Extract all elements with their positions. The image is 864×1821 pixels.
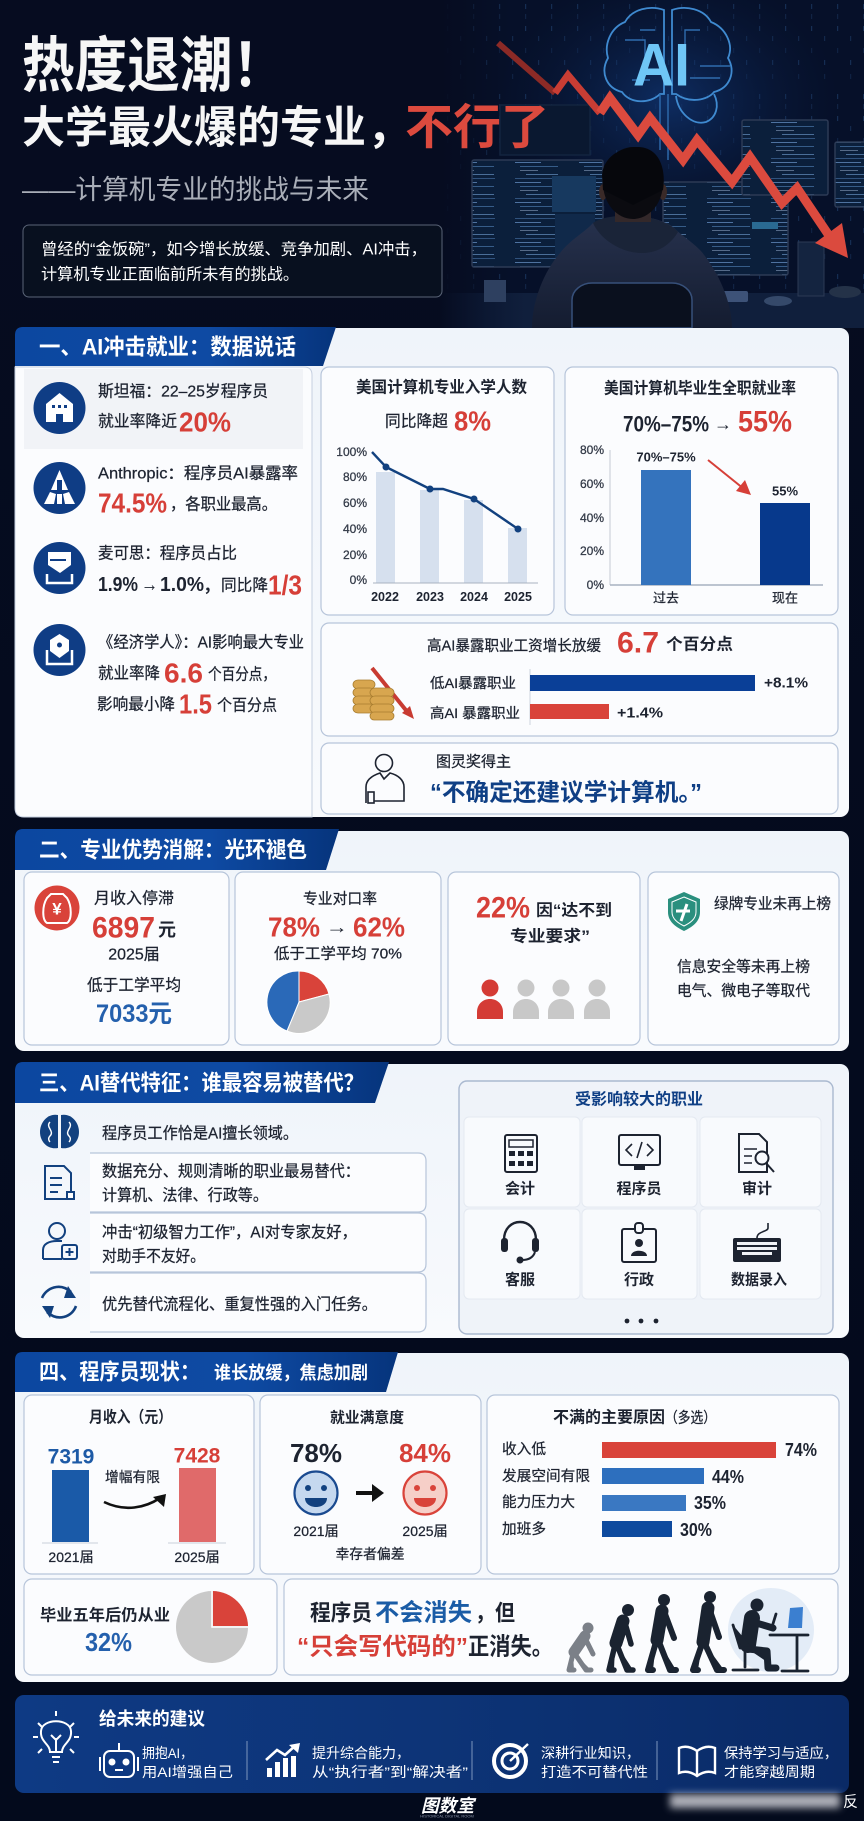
advice: embrace AI: 用AI增强自己	[142, 1764, 233, 1780]
stat: The Economist: 就业率降	[98, 664, 160, 682]
icon: target	[494, 1744, 528, 1777]
wage bars: 高AI 暴露职业	[430, 705, 520, 721]
card: green-badge majors: 电气、微电子等取代	[677, 982, 810, 1000]
panel: wage growth slowdown: 6.7	[617, 626, 659, 660]
person from behind	[532, 147, 732, 328]
desk with keyboard and mouse	[440, 242, 864, 328]
headline comma: ，	[367, 104, 411, 152]
bar chart: 60%	[580, 477, 604, 491]
stat: The Economist: 个百分点，	[208, 666, 276, 684]
horizontal bar chart: 30%	[680, 1520, 712, 1540]
stat: Anthropic	[98, 464, 298, 518]
stat: Stanford: 斯坦福：22–25岁程序员	[98, 382, 268, 400]
stat: Anthropic: 74.5%	[98, 488, 167, 518]
horizontal bar chart: 44%	[712, 1467, 744, 1487]
advice: deep industry knowledge: 深耕行业知识，	[541, 1745, 640, 1761]
card: job satisfaction: 84%	[399, 1438, 451, 1468]
icon: open book	[679, 1747, 715, 1776]
horizontal bar chart: 收入低	[502, 1441, 547, 1458]
red falling arrow	[498, 43, 848, 258]
chart panel: full-time employment rate: →	[714, 414, 732, 434]
card: 22 percent below requirements	[448, 872, 640, 1045]
card: job satisfaction: 2025届	[402, 1523, 448, 1539]
panel: section 4 programmer status	[15, 1352, 849, 1682]
feature row: repetitive tasks: 优先替代流程化、重复性强的入门任务。	[102, 1296, 377, 1314]
stat: The Economist: 1.5	[179, 688, 212, 720]
advice: keep learning: 才能穿越周期	[724, 1764, 815, 1780]
card: monthly income stagnant: 低于工学平均	[87, 976, 181, 994]
bar chart: 0%	[587, 578, 604, 592]
card: still in the industry after five years: 32%	[85, 1627, 132, 1657]
bar and line chart: 2025	[504, 590, 532, 604]
section 4 heading: 谁长放缓，焦虑加剧	[214, 1362, 368, 1383]
tile: audit: 审计	[742, 1180, 772, 1198]
chart panel: US CS enrolment: 8%	[454, 406, 491, 436]
section 2 heading	[15, 829, 339, 870]
icon: money bag: ¥	[52, 900, 62, 918]
panel: advice for the future: 给未来的建议	[99, 1709, 205, 1729]
panel: wage growth slowdown	[321, 623, 838, 736]
card: monthly income bars: 2025届	[174, 1549, 220, 1565]
illustration: evolution silhouettes	[569, 1588, 814, 1672]
bar chart: 过去	[653, 590, 679, 606]
bar chart: 80%	[580, 443, 604, 457]
red trend arrow	[708, 460, 751, 495]
card: green-badge majors	[648, 872, 839, 1045]
bar chart: 40%	[580, 511, 604, 525]
horizontal bar chart: 能力压力大	[502, 1494, 575, 1511]
section 2 heading: 二、专业优势消解：光环褪色	[39, 838, 307, 862]
watermark	[670, 1794, 858, 1810]
stat: Stanford: 20%	[179, 406, 231, 438]
bar and line chart: 40%	[343, 522, 367, 536]
card: monthly income stagnant	[24, 872, 229, 1045]
card: programmers will not disappear: 正消失。	[468, 1634, 553, 1660]
card: monthly income bars: 月收入（元）	[89, 1408, 172, 1426]
card: job satisfaction: 就业满意度	[330, 1408, 404, 1426]
card: 22 percent below requirements: 因“达不到	[536, 902, 612, 920]
card: job satisfaction: 2021届	[293, 1523, 339, 1539]
headline line 1: 热度退潮！	[22, 32, 285, 100]
wage bars	[430, 669, 808, 725]
section 3 heading	[15, 1062, 389, 1103]
horizontal bar chart	[502, 1440, 817, 1540]
advice: deep industry knowledge	[472, 1741, 648, 1780]
footer logo: HISTORICAL DIGITAL ROOM	[420, 1814, 474, 1818]
bar and line chart	[336, 445, 538, 604]
feature row: repetitive tasks	[42, 1273, 426, 1332]
stat: The Economist: 6.6	[164, 658, 203, 688]
icon: Economist envelope	[34, 624, 86, 676]
watermark: 反	[843, 1794, 858, 1810]
AI label: AI	[633, 32, 690, 98]
card: green-badge majors: 信息安全等未再上榜	[677, 958, 810, 976]
advice: keep learning	[657, 1741, 838, 1780]
card: programmers will not disappear: 程序员	[310, 1600, 372, 1626]
panel: Turing award winner quote	[321, 743, 838, 814]
feature row: strength area: 程序员工作恰是AI擅长领域。	[102, 1124, 298, 1142]
feature row: clear-rule jobs: 计算机、法律、行政等。	[102, 1186, 268, 1204]
card: monthly income bars: 7319	[48, 1446, 94, 1468]
bar and line chart: 60%	[343, 496, 367, 510]
stat: McKinsey: 1/3	[268, 570, 302, 600]
arrow	[356, 1484, 384, 1502]
feature row: entry-level work	[43, 1213, 426, 1272]
bar and line chart: 20%	[343, 548, 367, 562]
tile: administration	[582, 1209, 697, 1299]
panel: most affected occupations	[459, 1081, 833, 1334]
chart panel: full-time employment rate	[565, 367, 838, 615]
card: major match rate	[235, 872, 441, 1045]
stat: McKinsey: 1.0%	[160, 574, 204, 596]
intro callout	[23, 225, 442, 297]
footer logo: 图数室	[421, 1796, 477, 1816]
chart panel: US CS enrolment: 美国计算机专业入学人数	[356, 378, 527, 396]
panel: section 3 AI replacement features	[15, 1062, 849, 1338]
card: major match rate: 低于工学平均 70%	[274, 946, 402, 962]
ellipsis	[625, 1319, 658, 1323]
card: job satisfaction: 78%	[290, 1438, 342, 1468]
icon: person	[366, 754, 404, 803]
chart panel: full-time employment rate: 美国计算机毕业生全职就业率	[604, 378, 796, 398]
stat: McKinsey	[98, 544, 302, 600]
card: programmers will not disappear: ，但	[475, 1600, 515, 1626]
stat: Stanford: 就业率降近	[98, 412, 177, 430]
tile: customer service	[464, 1209, 580, 1299]
wage bars: +8.1%	[764, 674, 808, 692]
panel: most affected occupations: 受影响较大的职业	[575, 1090, 703, 1108]
card: major match rate: →	[326, 917, 348, 937]
icon: McKinsey funnel	[34, 542, 86, 594]
stat: The Economist	[97, 634, 304, 720]
section 1 heading	[15, 327, 336, 367]
intro callout: 曾经的“金饭碗”，如今增长放缓、竞争加剧、AI冲击，	[41, 240, 427, 258]
tile: audit	[700, 1117, 821, 1207]
card: monthly income bars: 增幅有限	[105, 1469, 160, 1485]
icon: document	[45, 1166, 74, 1199]
tile: programmer: 程序员	[616, 1180, 662, 1198]
icon: growth chart	[266, 1743, 300, 1777]
section 4 heading	[15, 1352, 398, 1392]
advice: raise overall capability: 提升综合能力，	[312, 1745, 410, 1761]
advice: embrace AI	[100, 1743, 233, 1780]
card: programmers will not disappear	[284, 1579, 838, 1675]
bar chart: 55%	[772, 484, 798, 498]
monitors	[472, 105, 864, 275]
bar and line chart: 2022	[371, 590, 399, 604]
panel: Turing award winner quote: 图灵奖得主	[436, 754, 511, 770]
intro callout: 计算机专业正面临前所未有的挑战。	[41, 264, 299, 284]
bar and line chart: 2023	[416, 590, 444, 604]
icon: person with briefcase	[43, 1223, 77, 1259]
bar chart: 现在	[772, 590, 798, 606]
advice: embrace AI: 拥抱AI，	[142, 1745, 193, 1761]
panel: Turing award winner quote: “不确定还建议学计算机。”	[430, 780, 702, 806]
panel: advice for the future	[15, 1695, 849, 1793]
icon: money bag	[34, 886, 80, 930]
card: 22 percent below requirements: 专业要求”	[510, 928, 590, 946]
tile: accounting	[464, 1117, 580, 1207]
bar and line chart: 80%	[343, 470, 367, 484]
bar chart: 20%	[580, 544, 604, 558]
hero illustration: programmer facing AI and falling arrow	[440, 0, 864, 328]
stat: McKinsey: →	[141, 574, 158, 596]
stat: Anthropic: ，各职业最高。	[170, 496, 277, 514]
card: 22 percent below requirements: 22%	[476, 892, 530, 924]
tile: accounting: 会计	[505, 1180, 535, 1198]
stat: Anthropic: Anthropic：程序员AI暴露率	[98, 464, 298, 482]
stat: McKinsey: ，	[203, 576, 220, 596]
advice: deep industry knowledge: 打造不可替代性	[541, 1764, 648, 1780]
section 3 heading: 三、AI替代特征：谁最容易被替代？	[39, 1070, 364, 1096]
icon: shield	[668, 892, 700, 931]
panel: section 1 AI impact	[15, 327, 849, 817]
chart panel: full-time employment rate: 55%	[738, 406, 792, 438]
card: monthly income stagnant: 6897	[92, 912, 155, 944]
chart panel: full-time employment rate: 70%–75%	[623, 412, 709, 436]
headline highlight: 不行了	[405, 102, 549, 154]
horizontal bar chart: 加班多	[502, 1521, 546, 1538]
card: programmers will not disappear: “只会写代码的”	[297, 1634, 468, 1660]
stat: McKinsey: 同比降	[221, 576, 268, 594]
wage bars: 低AI暴露职业	[430, 675, 516, 691]
wage bars: +1.4%	[617, 704, 663, 722]
card: monthly income bars	[24, 1395, 254, 1574]
feature row: clear-rule jobs	[45, 1153, 426, 1212]
tile: data entry	[700, 1209, 821, 1299]
pie chart	[176, 1591, 248, 1663]
panel: section 2 major advantages	[15, 829, 849, 1051]
stat: The Economist: 影响最小降	[97, 696, 175, 714]
advice: raise overall capability	[247, 1741, 468, 1780]
card: monthly income stagnant: 月收入停滞	[94, 890, 174, 908]
bar and line chart: 2024	[460, 590, 488, 604]
card: green-badge majors: 绿牌专业未再上榜	[714, 896, 831, 912]
left column: data points	[15, 367, 312, 817]
card: reasons for dissatisfaction	[487, 1395, 839, 1574]
icon: AI brain	[604, 8, 732, 160]
stat: McKinsey: 麦可思：程序员占比	[98, 544, 237, 562]
card: programmers will not disappear: 不会消失	[375, 1600, 472, 1626]
stat: Stanford	[98, 382, 268, 438]
subtitle: ——计算机专业的挑战与未来	[22, 175, 369, 205]
tile: customer service: 客服	[505, 1270, 535, 1288]
card: still in the industry after five years: 毕业五年后仍从业	[40, 1606, 170, 1624]
chart panel: US CS enrolment: 同比降超	[385, 412, 448, 430]
horizontal bar chart: 发展空间有限	[502, 1468, 590, 1485]
card: monthly income bars: 7428	[174, 1444, 221, 1468]
feature row: entry-level work: 冲击“初级智力工作”，AI对专家友好，	[102, 1224, 357, 1242]
horizontal bar chart: 74%	[785, 1440, 817, 1460]
stat: McKinsey: 1.9%	[98, 574, 138, 596]
icon: blue smiley	[294, 1472, 338, 1514]
tile: programmer	[582, 1117, 697, 1207]
icon row: people	[477, 980, 610, 1019]
card: reasons for dissatisfaction: （多选）	[665, 1410, 716, 1426]
stat: The Economist: 《经济学人》：AI影响最大专业	[98, 634, 304, 652]
tile: administration: 行政	[624, 1272, 654, 1288]
icon: pyramid	[34, 462, 86, 514]
card: reasons for dissatisfaction: 不满的主要原因	[553, 1408, 665, 1426]
headline line 2: 大学最火爆的专业	[22, 104, 366, 152]
icon: building	[34, 382, 86, 434]
card: job satisfaction: 幸存者偏差	[336, 1546, 404, 1562]
card: still in the industry after five years	[24, 1579, 277, 1675]
title	[22, 32, 549, 205]
feature row: strength area	[40, 1115, 298, 1148]
horizontal bar chart: 35%	[694, 1493, 726, 1513]
panel: wage growth slowdown: 高AI暴露职业工资增长放缓	[427, 638, 601, 654]
stat: The Economist: 个百分点	[217, 696, 277, 714]
icon: cycle arrows	[42, 1286, 76, 1318]
feature row: clear-rule jobs: 数据充分、规则清晰的职业最易替代：	[102, 1162, 360, 1180]
icon: robot	[100, 1743, 138, 1777]
card: job satisfaction	[260, 1395, 481, 1574]
bar chart: 70%–75%	[636, 450, 696, 464]
section 1 heading: 一、AI冲击就业：数据说话	[39, 334, 296, 360]
card: monthly income stagnant: 元	[158, 920, 176, 940]
section 4 heading: 四、程序员现状：	[39, 1360, 200, 1384]
icon: red smiley	[404, 1472, 446, 1514]
card: monthly income bars: 2021届	[48, 1549, 94, 1565]
card: major match rate: 专业对口率	[303, 890, 377, 908]
card: major match rate: 78%	[268, 912, 320, 942]
icon: light bulb	[33, 1711, 79, 1762]
chart panel: US CS enrolment	[321, 367, 554, 615]
icon: brain	[40, 1115, 79, 1148]
feature row: entry-level work: 对助手不友好。	[102, 1248, 205, 1266]
icon: coins with falling arrow	[353, 668, 414, 720]
bar and line chart: 100%	[336, 445, 367, 459]
card: monthly income stagnant: 7033元	[96, 1000, 172, 1028]
advice: raise overall capability: 从“执行者”到“解决者”	[312, 1764, 468, 1780]
panel: wage growth slowdown: 个百分点	[666, 634, 733, 654]
bar chart	[580, 443, 823, 606]
curved arrow	[104, 1494, 166, 1508]
bar and line chart: 0%	[350, 573, 367, 587]
tile: data entry: 数据录入	[731, 1270, 787, 1288]
card: monthly income stagnant: 2025届	[108, 946, 160, 964]
pie chart	[267, 971, 330, 1033]
advice: keep learning: 保持学习与适应，	[724, 1745, 838, 1761]
card: major match rate: 62%	[353, 912, 405, 942]
